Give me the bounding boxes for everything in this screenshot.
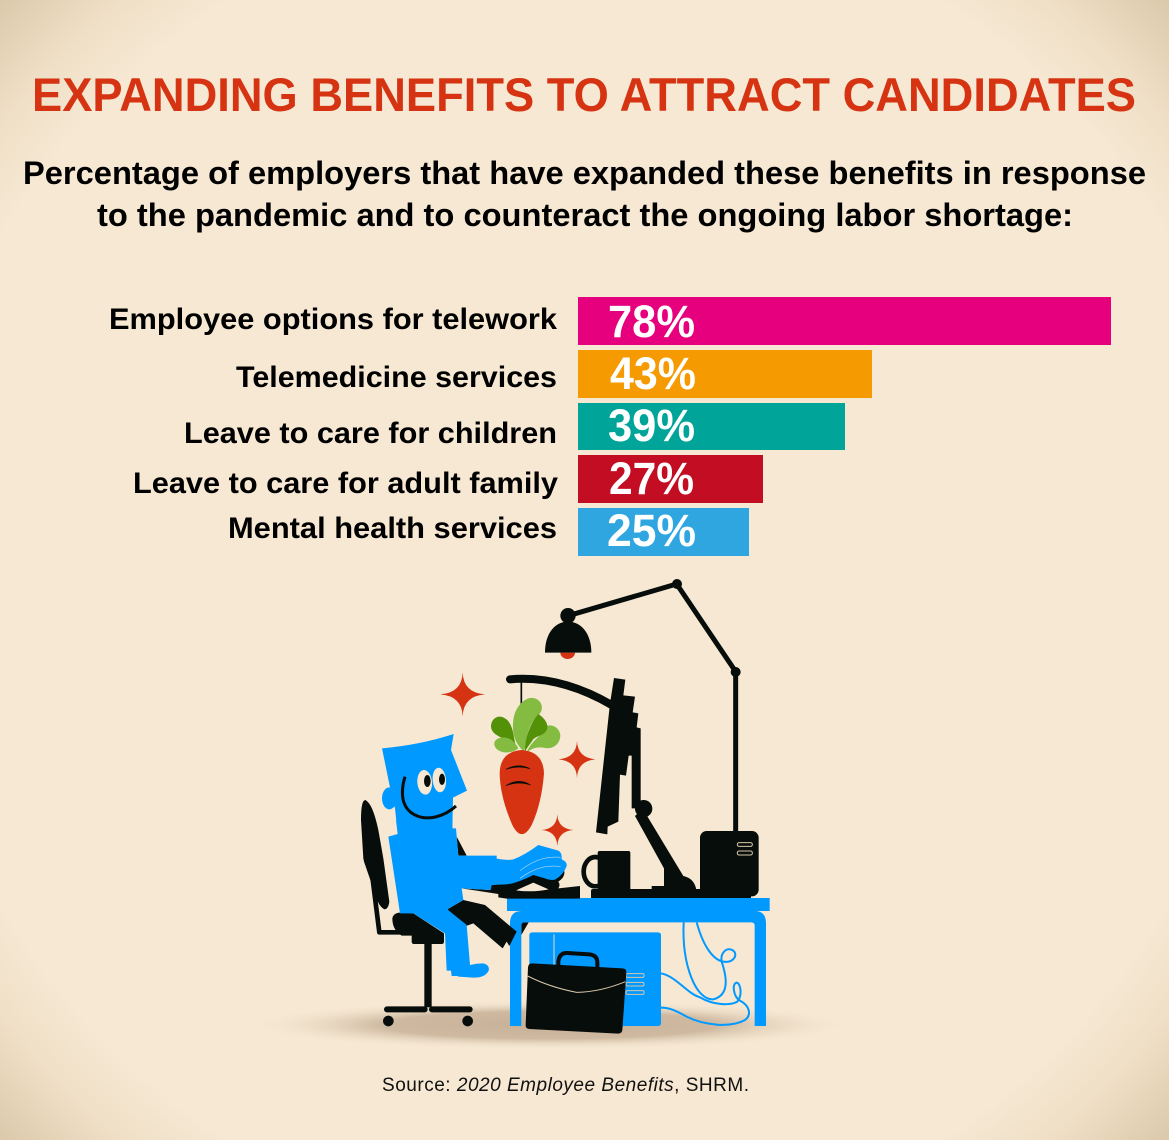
bar row: adult family: Leave to care for adult family bbox=[133, 467, 558, 500]
subtitle: to the pandemic and to counteract the ongoing labor shortage: bbox=[97, 197, 1073, 233]
keyboard and far arm bbox=[457, 837, 580, 899]
icon: office chair bbox=[361, 800, 473, 1026]
bar row: telework: 78% bbox=[608, 296, 695, 347]
bar row: children: 39% bbox=[608, 400, 695, 451]
person head bbox=[382, 672, 595, 846]
back leg under desk bbox=[521, 922, 529, 935]
person body bbox=[388, 820, 567, 978]
icon: monitor stand bbox=[635, 809, 697, 892]
icon: briefcase bbox=[526, 953, 626, 1034]
icon: eyes bbox=[416, 767, 447, 795]
desk surface objects bbox=[591, 889, 751, 899]
icon: carrot bbox=[491, 682, 560, 834]
desk bbox=[507, 898, 770, 1034]
bar row: telework: Employee options for telework bbox=[109, 303, 557, 336]
icon: computer tower bbox=[700, 831, 759, 896]
bar row: mental health: 25% bbox=[607, 505, 696, 556]
bar row: adult family: 27% bbox=[609, 453, 694, 504]
bar row: telework bbox=[109, 296, 1111, 347]
floor shadow bbox=[245, 1000, 855, 1050]
bar chart bbox=[109, 296, 1111, 556]
title: EXPANDING BENEFITS TO ATTRACT CANDIDATES bbox=[32, 68, 1136, 121]
bar row: children bbox=[184, 400, 845, 451]
illustration: office worker with carrot bbox=[361, 579, 770, 1034]
bar row: mental health: Mental health services bbox=[228, 512, 557, 545]
bar row: telemedicine: Telemedicine services bbox=[236, 361, 557, 394]
bar row: adult family bbox=[133, 453, 763, 504]
bar row: telemedicine: 43% bbox=[610, 348, 696, 399]
far leg bbox=[447, 900, 517, 948]
subtitle bbox=[23, 155, 1146, 233]
person and chair bbox=[361, 800, 580, 1026]
icon: sparkle lower bbox=[542, 814, 573, 846]
desk frame bbox=[510, 911, 766, 1026]
desk top bbox=[507, 898, 770, 911]
icon: desk lamp bbox=[545, 579, 741, 833]
icon: sparkle right bbox=[559, 741, 595, 778]
bar row: children: Leave to care for children bbox=[184, 417, 557, 450]
icon: sparkle left bbox=[440, 672, 485, 716]
icon: computer monitor bbox=[510, 678, 641, 834]
desk drawer box bbox=[529, 932, 661, 1026]
subtitle: Percentage of employers that have expanded these benefits in response bbox=[23, 155, 1146, 191]
bar row: telemedicine bbox=[236, 348, 872, 399]
icon: coffee mug bbox=[584, 851, 630, 891]
source note: Source: 2020 Employee Benefits, SHRM. bbox=[382, 1075, 749, 1096]
cables bbox=[661, 922, 749, 1025]
bar row: mental health bbox=[228, 505, 749, 556]
icon: smile bbox=[402, 777, 456, 818]
lamp and monitor bbox=[510, 579, 759, 899]
